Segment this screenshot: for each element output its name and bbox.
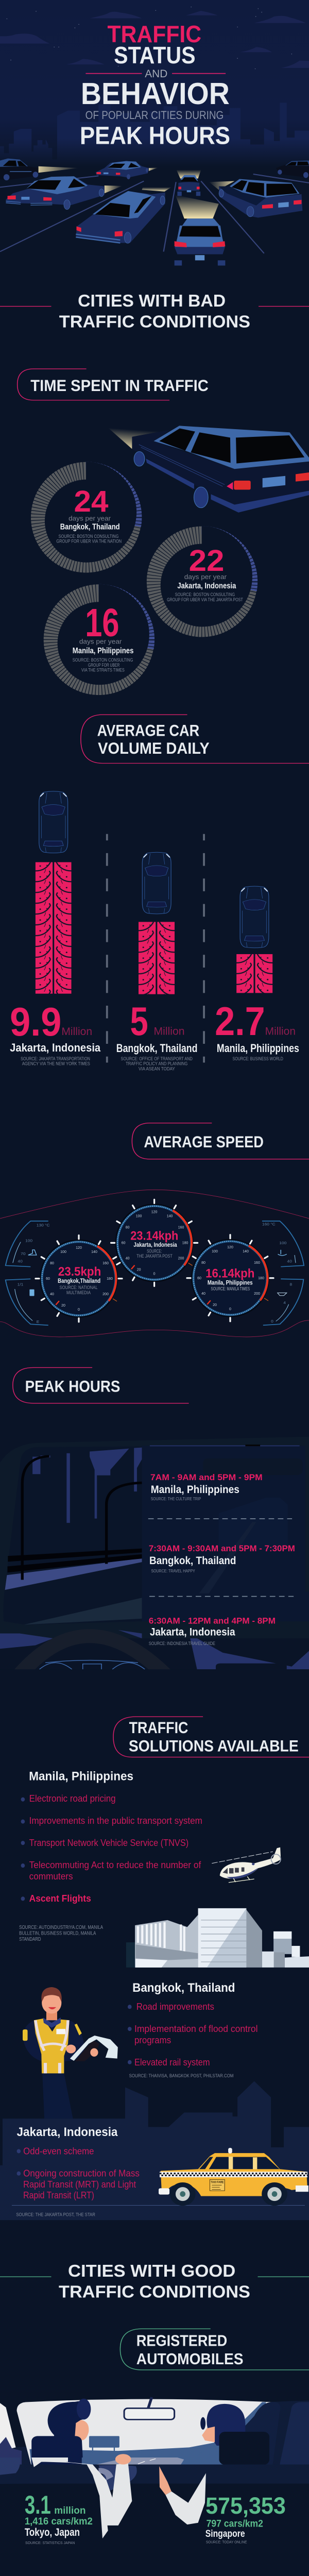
gauge: Bangkok speed: 140 <box>91 1250 97 1254</box>
heading: cities with bad traffic conditions <box>0 291 309 331</box>
text: Jakarta peak hours <box>149 1616 276 1646</box>
text: Manila solutions: Improvements in the public transport system <box>29 1816 202 1826</box>
text: Manila peak hours: 7AM - 9AM and 5PM - 9PM <box>150 1472 263 1482</box>
heading: traffic solutions available <box>113 1717 309 1757</box>
dashboard outline and side gauges: 4 <box>283 1300 286 1305</box>
text: Jakarta solutions: SOURCE: THE JAKARTA POST, THE STAR <box>16 2212 95 2217</box>
heading: traffic solutions available: TRAFFIC <box>129 1719 188 1737</box>
dashboard outline and side gauges: 8 <box>289 1282 293 1286</box>
panel: average speed <box>0 1123 309 1337</box>
gauge: Jakarta speed: Jakarta, Indonesia <box>133 1241 177 1248</box>
chart: Jakarta days per year ring: SOURCE: BOSTON CONSULTING <box>175 592 235 598</box>
stat: Singapore registered automobiles <box>205 2493 286 2545</box>
gauge: Jakarta speed: 80 <box>126 1226 130 1229</box>
chart: Jakarta tyre bar: AGENCY VIA THE NEW YORK TIMES <box>22 1061 90 1066</box>
panel: Bangkok and Jakarta solutions <box>0 1980 309 2220</box>
chart: Bangkok tyre bar <box>116 852 197 1072</box>
panel: hero <box>0 0 309 273</box>
heading: average speed: AVERAGE SPEED <box>144 1133 264 1151</box>
chart: Bangkok days per year ring: Bangkok, Thailand <box>60 522 120 531</box>
dashboard outline and side gauges: 40 <box>18 1259 23 1263</box>
gauge: Bangkok speed: Bangkok,Thailand <box>58 1277 100 1284</box>
chart: Manila days per year ring: VIA THE STRAITS TIMES <box>81 668 125 673</box>
gauge: Manila speed: 160 <box>254 1261 260 1265</box>
gauge: Jakarta speed: 160 <box>178 1226 184 1229</box>
text: Manila solutions: Telecommuting Act to reduce the number of <box>29 1860 201 1871</box>
title: STATUS <box>114 42 196 69</box>
car: right wagon <box>219 179 302 218</box>
chart: Bangkok tyre bar: 5 <box>130 998 148 1044</box>
text: Manila peak hours: Manila, Philippines <box>151 1483 239 1495</box>
chart: Jakarta tyre bar: Million <box>61 1025 92 1038</box>
gauge: Jakarta speed: THE JAKARTA POST <box>136 1254 173 1259</box>
chart: Bangkok days per year ring: 24 <box>74 485 109 518</box>
gauge: Bangkok speed: SOURCE: NATIONAL <box>60 1285 98 1291</box>
gauge: Manila speed: Manila, Philippines <box>208 1279 253 1286</box>
chart: Manila days per year ring: 16 <box>85 601 119 645</box>
heading: time spent in traffic <box>18 369 209 400</box>
heading: registered automobiles <box>120 2329 309 2370</box>
text: Bangkok solutions: SOURCE: THAIVISA, BANGKOK POST, PHILSTAR.COM <box>129 2073 234 2078</box>
text: Manila solutions: Ascent Flights <box>29 1893 91 1904</box>
stat: Singapore registered automobiles: 575,353 <box>205 2493 286 2519</box>
heading: average car volume daily: AVERAGE CAR <box>97 722 199 740</box>
dashboard outline and side gauges: 100 <box>279 1241 287 1245</box>
heading: cities with bad traffic conditions: TRAFFIC CONDITIONS <box>59 312 250 331</box>
gauge: Manila speed: 40 <box>201 1292 205 1296</box>
heading: average car volume daily <box>81 715 309 763</box>
city skyline <box>0 103 309 167</box>
dashboard outline and side gauges: 160 °C <box>262 1222 276 1226</box>
gauge: Jakarta speed: 60 <box>122 1242 126 1245</box>
heading: peak hours: PEAK HOURS <box>25 1378 120 1396</box>
text: Manila solutions: STANDARD <box>19 1936 41 1942</box>
car: big left <box>6 176 105 210</box>
chart: Bangkok tyre bar: TRAFFIC POLICY AND PLANNING <box>126 1061 187 1066</box>
panel: cities with good traffic <box>0 2261 309 2484</box>
stat: Tokyo registered automobiles <box>25 2491 93 2545</box>
text: Bangkok peak hours: SOURCE: TRAVEL HAPPY <box>151 1569 195 1573</box>
text: Jakarta solutions: Rapid Transit (MRT) and Light <box>23 2179 136 2190</box>
headlight beams <box>39 166 234 218</box>
gauge: Jakarta speed: 40 <box>126 1257 130 1260</box>
heading: cities with bad traffic conditions: CITIES WITH BAD <box>78 291 226 310</box>
heading: average speed <box>132 1123 309 1159</box>
car: top centre rear <box>177 175 200 196</box>
stat: Tokyo registered automobiles: 1,416 cars/km2 <box>25 2516 93 2527</box>
dashboard outline and side gauges: 70 <box>21 1251 26 1256</box>
chart: Bangkok tyre bar: VIA ASEAN TODAY <box>139 1066 175 1072</box>
text: Manila solutions: commuters <box>29 1871 73 1882</box>
heading: registered automobiles: REGISTERED <box>136 2332 227 2349</box>
chart: Bangkok tyre bar: Million <box>153 1025 185 1037</box>
illustration: city buildings <box>126 1908 309 1968</box>
gauge: Manila speed: 60 <box>197 1277 201 1280</box>
chart: Bangkok tyre bar: Bangkok, Thailand <box>116 1042 197 1055</box>
gauge: Jakarta speed: 100 <box>136 1215 142 1218</box>
title: PEAK HOURS <box>80 122 230 149</box>
stat: Tokyo registered automobiles: 3.1 <box>25 2491 51 2519</box>
panel: cities with bad traffic <box>0 291 309 513</box>
text: Bangkok peak hours: Bangkok, Thailand <box>149 1554 236 1567</box>
panel: registered automobiles figures <box>0 2454 309 2576</box>
gauge: Jakarta speed: 180 <box>182 1242 188 1245</box>
text: Manila solutions: BULLETIN, BUSINESS WORLD, MANILA <box>19 1930 96 1936</box>
heading: average car volume daily: VOLUME DAILY <box>98 740 210 757</box>
gauge: Bangkok speed: 80 <box>50 1262 54 1265</box>
chart: Bangkok tyre bar: SOURCE: OFFICE OF TRANSPORT AND <box>121 1057 193 1061</box>
chart: Jakarta days per year ring <box>147 526 258 637</box>
chart: Manila days per year ring: GROUP FOR UBER <box>88 663 119 668</box>
text: Jakarta solutions: Odd-even scheme <box>23 2146 94 2157</box>
text: Bangkok solutions: Elevated rail system <box>134 2057 210 2068</box>
chart: Jakarta tyre bar: SOURCE: JAKARTA TRANSPORTATION <box>21 1057 90 1061</box>
text: Jakarta solutions <box>16 2125 140 2217</box>
chart: Jakarta tyre bar <box>10 791 101 1066</box>
text: Manila peak hours <box>150 1472 263 1501</box>
gauge: Manila speed <box>179 1227 281 1329</box>
text: Jakarta solutions: Jakarta, Indonesia <box>17 2125 118 2139</box>
stat: Singapore registered automobiles: SOURCE: TODAY ONLINE <box>206 2540 247 2545</box>
text: Bangkok solutions: Implementation of flood control <box>134 2024 258 2035</box>
icon: yellow taxi <box>159 2148 308 2206</box>
text: Bangkok solutions: Road improvements <box>136 2002 214 2012</box>
stat: Singapore registered automobiles: Singapore <box>205 2528 245 2539</box>
chart: Manila tyre bar: SOURCE: BUSINESS WORLD <box>233 1057 283 1061</box>
gauge: Jakarta speed: 140 <box>167 1215 173 1218</box>
text: Manila solutions: Manila, Philippines <box>29 1769 133 1783</box>
icon: helicopter <box>212 1848 281 1883</box>
heading: cities with good traffic conditions: TRAFFIC CONDITIONS <box>59 2282 250 2301</box>
gauge: Manila speed: 140 <box>243 1250 249 1253</box>
gauge: Bangkok speed: 23.5kph <box>58 1265 101 1279</box>
chart: Manila days per year ring <box>44 584 154 695</box>
illustration: view through windshield <box>0 1437 309 1690</box>
heading: cities with good traffic conditions: CITIES WITH GOOD <box>68 2261 235 2281</box>
gauge: Manila speed: 180 <box>258 1277 264 1280</box>
title: AND <box>145 67 167 80</box>
gauge: Bangkok speed: 180 <box>107 1277 113 1281</box>
car: foreground rear <box>175 218 225 265</box>
gauge: Manila speed: 16.14kph <box>205 1266 254 1280</box>
icon: car with headlight <box>107 426 309 513</box>
chart: Manila tyre bar: Million <box>265 1025 296 1037</box>
chart: Jakarta tyre bar: 9.9 <box>10 999 61 1044</box>
text: Jakarta solutions: Ongoing construction of Mass <box>23 2168 140 2179</box>
gauge: Bangkok speed: 40 <box>50 1293 54 1296</box>
gauge: Jakarta speed: 120 <box>151 1211 158 1214</box>
title: TRAFFIC <box>108 21 201 47</box>
gauge: Jakarta speed: SOURCE: <box>147 1249 162 1254</box>
text: Jakarta peak hours: Jakarta, Indonesia <box>150 1626 235 1638</box>
car: centre left <box>76 191 165 243</box>
heading: peak hours <box>13 1367 189 1403</box>
car: far right <box>276 161 309 178</box>
gauge: Bangkok speed: 0 <box>78 1308 80 1312</box>
gauge: Bangkok speed: MULTIMEDIA <box>66 1291 91 1296</box>
heading: time spent in traffic: TIME SPENT IN TRAFFIC <box>30 377 209 395</box>
gauge: Bangkok speed: 200 <box>102 1293 109 1296</box>
panel: average car volume <box>10 715 309 1072</box>
title: OF POPULAR CITIES DURING <box>85 109 224 122</box>
icon: yellow taxi: TAXI FARE <box>211 2181 224 2184</box>
dashboard outline and side gauges <box>0 1190 309 1337</box>
dashboard outline and side gauges: E <box>37 1319 39 1324</box>
chart: Jakarta tyre bar: Jakarta, Indonesia <box>10 1042 101 1054</box>
illustration: car interior with driver and passenger <box>0 2397 309 2484</box>
gauge: Manila speed: 120 <box>227 1246 233 1249</box>
chart: Bangkok days per year ring <box>31 462 142 573</box>
gauge: Jakarta speed: 20 <box>137 1268 141 1272</box>
gauge: Manila speed: 80 <box>201 1261 205 1265</box>
chart: Bangkok days per year ring: days per year <box>68 515 111 522</box>
chart: Manila days per year ring: SOURCE: BOSTON CONSULTING <box>73 658 133 663</box>
road lanes <box>0 168 309 273</box>
text: Bangkok peak hours <box>149 1544 295 1573</box>
road line <box>12 2205 305 2206</box>
gauge: Bangkok speed: 100 <box>60 1250 66 1254</box>
heading: registered automobiles: AUTOMOBILES <box>136 2350 244 2367</box>
chart: Jakarta days per year ring: Jakarta, Indonesia <box>177 581 236 590</box>
gauge: Bangkok speed <box>28 1228 130 1330</box>
gauge: Manila speed: SOURCE: MANILA TIMES <box>211 1286 250 1292</box>
gauge: Jakarta speed: 23.14kph <box>130 1229 178 1243</box>
car: far left <box>0 159 39 180</box>
gauge: Bangkok speed: 60 <box>46 1277 50 1281</box>
chart: Jakarta days per year ring: days per year <box>184 573 227 581</box>
chart: Jakarta days per year ring: GROUP FOR UBER VIA THE JAKARTA POST <box>167 597 243 603</box>
text: Manila solutions: SOURCE: AUTOINDUSTRIYA.COM, MANILA <box>19 1924 104 1930</box>
car: top middle <box>96 161 149 179</box>
chart: Jakarta days per year ring: 22 <box>189 544 224 578</box>
gauge: Bangkok speed: 120 <box>76 1246 82 1250</box>
stat: Tokyo registered automobiles: Tokyo, Japan <box>25 2526 80 2538</box>
city silhouette <box>0 2081 309 2220</box>
gauge: Jakarta speed <box>104 1192 205 1294</box>
text: Jakarta solutions: Rapid Transit (LRT) <box>23 2190 94 2201</box>
text: Jakarta peak hours: SOURCE: INDONESIA TRAVEL GUIDE <box>149 1641 215 1646</box>
lane dividers <box>107 834 204 1063</box>
illustration: traffic officer <box>23 1987 118 2119</box>
gauge: Manila speed: 20 <box>213 1303 217 1307</box>
text: Jakarta peak hours: 6:30AM - 12PM and 4PM - 8PM <box>149 1616 276 1625</box>
chart: Manila days per year ring: days per year <box>79 638 122 645</box>
text: Bangkok solutions <box>128 1980 258 2078</box>
title: BEHAVIOR <box>81 77 230 111</box>
stat: Singapore registered automobiles: 797 cars/km2 <box>207 2518 263 2529</box>
gauge: Manila speed: 200 <box>254 1292 260 1296</box>
dashboard outline and side gauges: 1/1 <box>18 1282 24 1286</box>
dashboard outline and side gauges: 100 <box>25 1239 33 1243</box>
chart: Bangkok days per year ring: SOURCE: BOSTON CONSULTING <box>59 534 118 539</box>
dashboard outline and side gauges: 130 °C <box>37 1223 50 1227</box>
panel: traffic solutions <box>19 1717 309 1942</box>
text: Manila solutions: Electronic road pricing <box>29 1793 116 1804</box>
gauge: Jakarta speed: 0 <box>153 1273 156 1276</box>
text: Bangkok solutions: programs <box>134 2035 171 2046</box>
chart: Manila tyre bar <box>215 886 299 1061</box>
gauge: Manila speed: 100 <box>212 1250 218 1253</box>
gauge: Bangkok speed: 160 <box>102 1262 109 1265</box>
chart: Manila tyre bar: 2.7 <box>215 998 265 1044</box>
text: Manila solutions <box>19 1769 202 1942</box>
stat: Tokyo registered automobiles: SOURCE: STATISTICS JAPAN <box>25 2540 75 2545</box>
dashboard outline and side gauges: 40 <box>287 1259 292 1263</box>
chart: Bangkok days per year ring: GROUP FOR UBER VIA THE NATION <box>56 539 122 544</box>
text: Bangkok solutions: Bangkok, Thailand <box>132 1980 235 1995</box>
gauge: Manila speed: 0 <box>229 1308 231 1311</box>
illustration: dashboard and arms <box>0 2454 309 2538</box>
text: Manila solutions: Transport Network Vehicle Service (TNVS) <box>29 1838 188 1849</box>
gauge: Bangkok speed: 20 <box>61 1304 65 1308</box>
heading: cities with good traffic conditions <box>0 2261 309 2301</box>
dashboard outline and side gauges: 0 <box>271 1319 273 1324</box>
text: Manila peak hours: SOURCE: THE CULTURE TRIP <box>151 1496 201 1501</box>
title <box>80 21 230 149</box>
panel: peak hours <box>0 1367 309 1690</box>
chart: Manila days per year ring: Manila, Philippines <box>73 646 133 655</box>
gauge: Jakarta speed: 200 <box>178 1257 184 1260</box>
stat: Tokyo registered automobiles: million <box>54 2505 85 2516</box>
